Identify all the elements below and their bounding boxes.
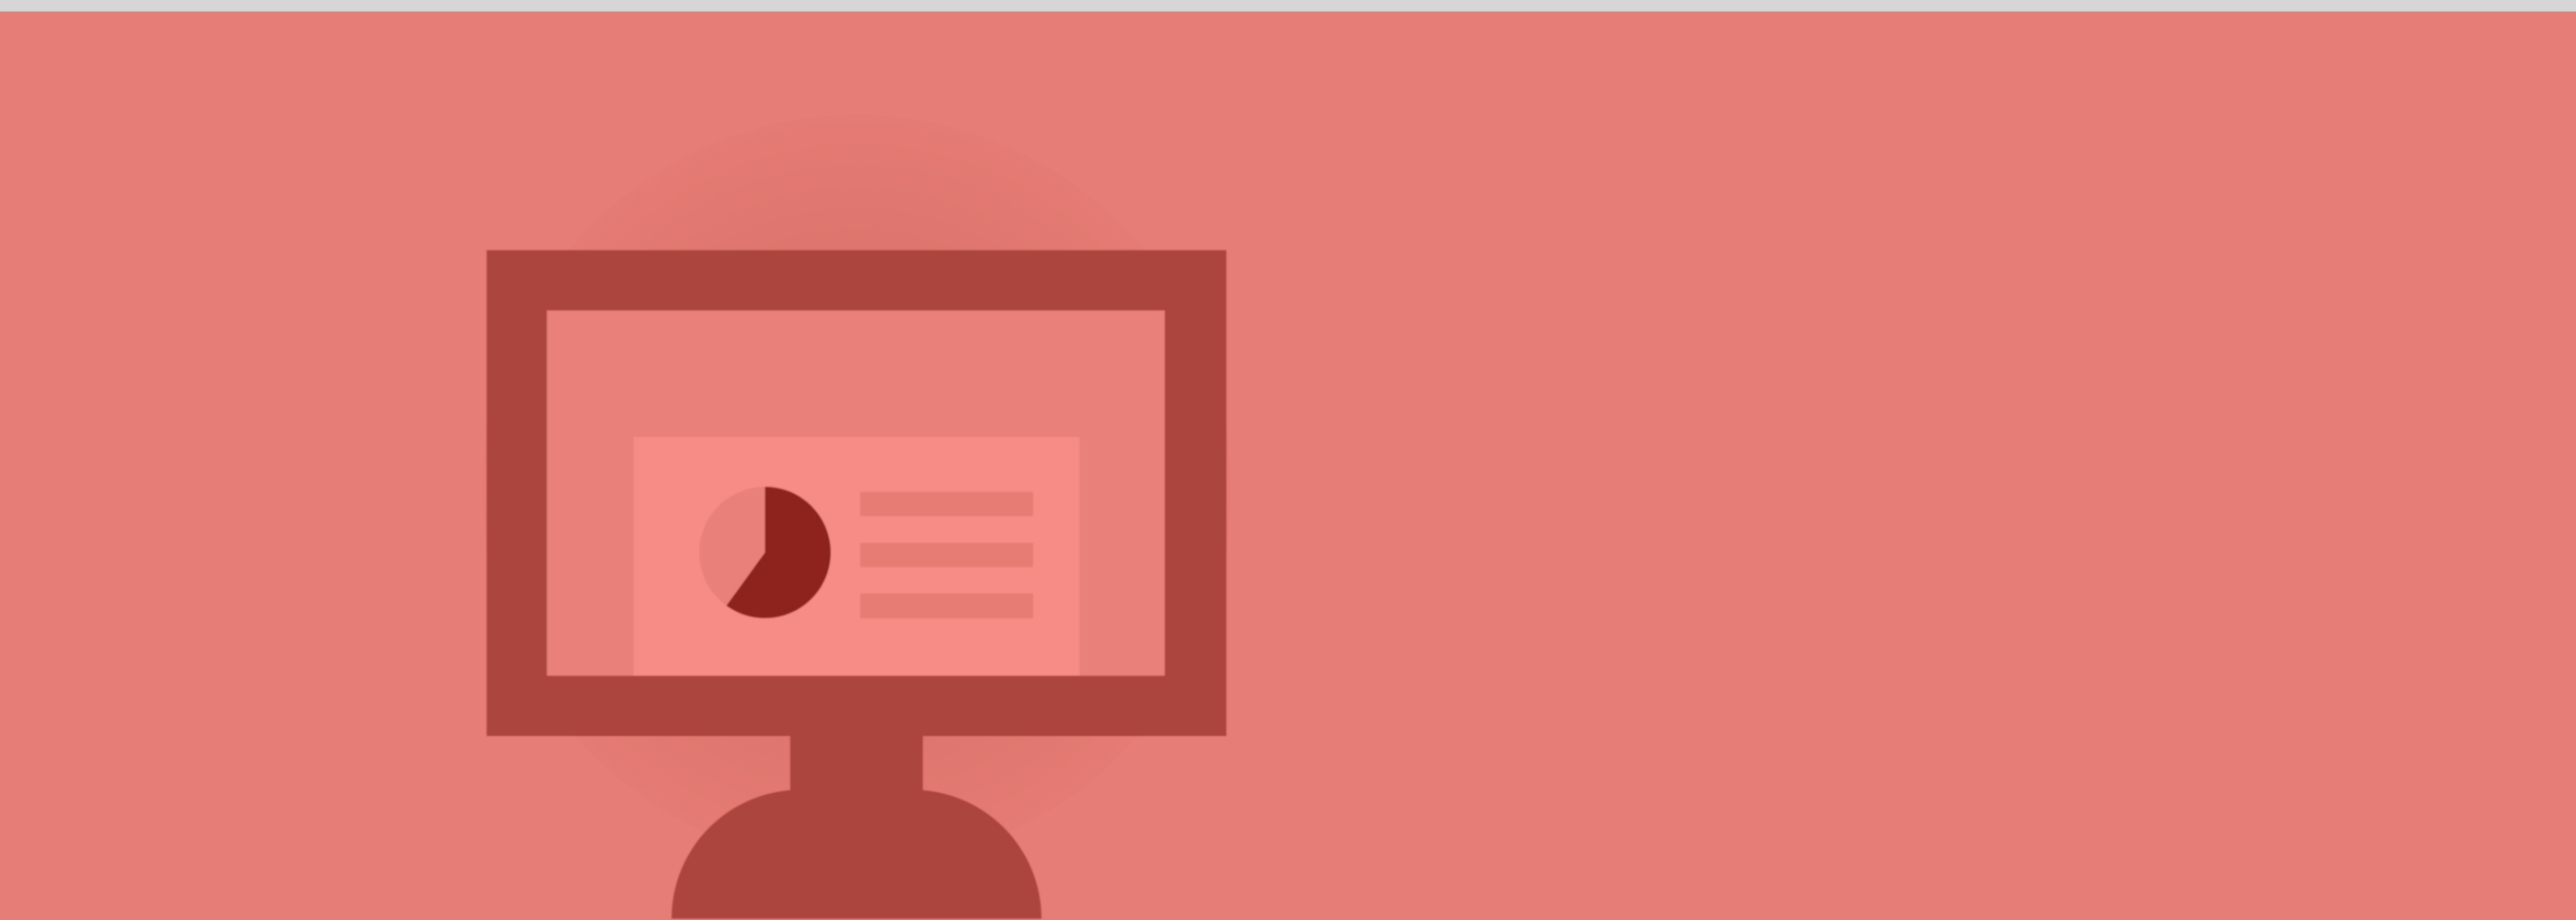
pie chart — [699, 487, 831, 618]
line 1 — [860, 491, 1033, 516]
text line placeholders — [860, 491, 1033, 618]
soft circular glow behind monitor — [482, 115, 1231, 864]
icon: computer monitor — [487, 250, 1226, 918]
monitor stand base — [672, 789, 1041, 918]
line 2 — [860, 543, 1033, 567]
monitor frame — [487, 250, 1226, 736]
monitor screen — [546, 311, 1165, 675]
top grey bar — [0, 0, 2576, 11]
pie chart: dark slice — [727, 487, 831, 618]
monitor stand neck — [790, 727, 923, 800]
pie chart: light slice — [699, 487, 831, 618]
line 3 — [860, 593, 1033, 618]
slide panel on screen — [633, 437, 1080, 675]
